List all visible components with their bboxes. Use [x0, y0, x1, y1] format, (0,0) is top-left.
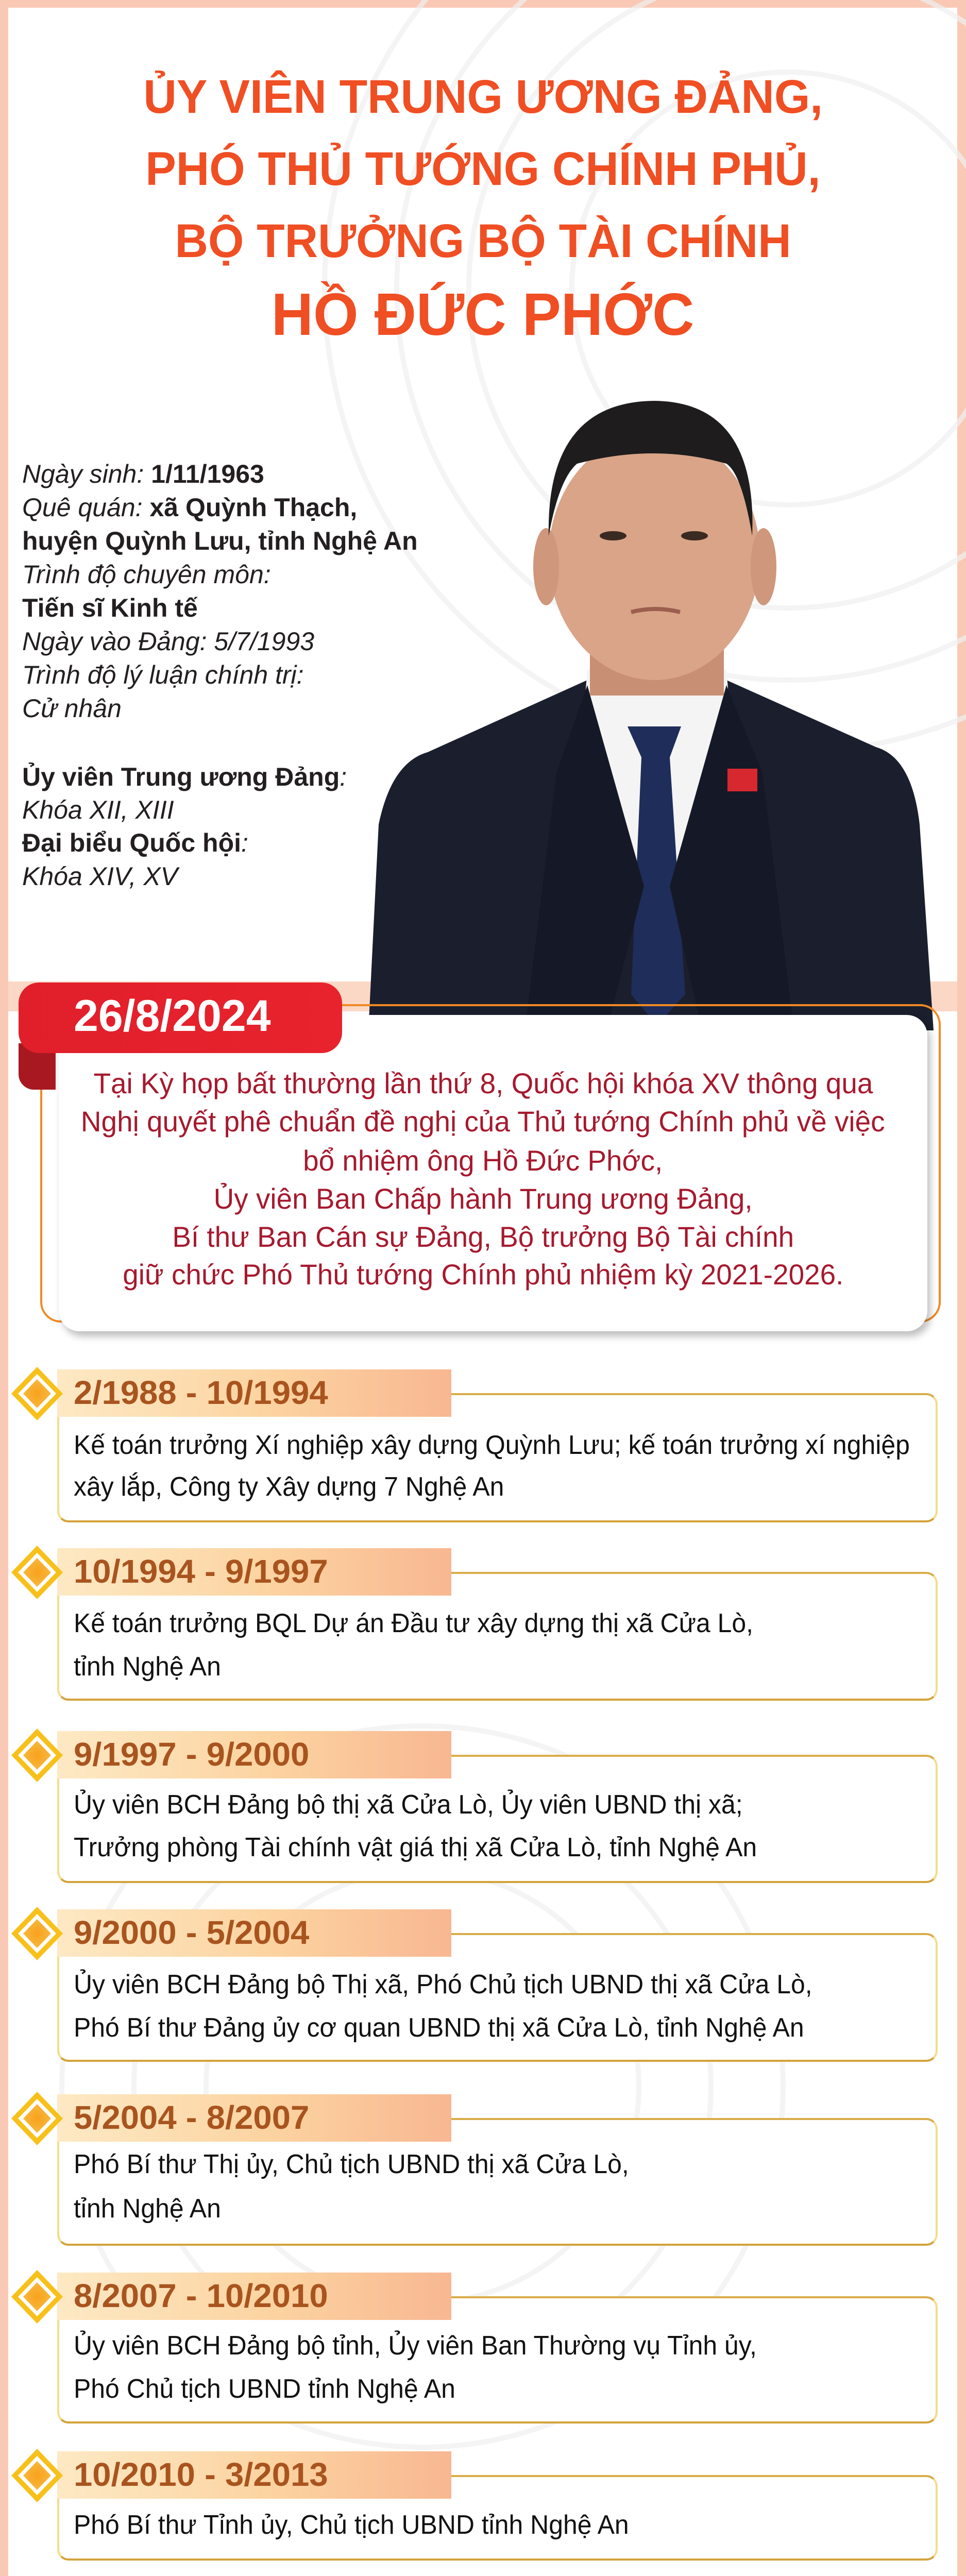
timeline item 2: 10/1994 - 9/1997 — [74, 1553, 328, 1590]
timeline item 1: xây lắp, Công ty Xây dựng 7 Nghệ An — [74, 1472, 504, 1502]
timeline item 2: tỉnh Nghệ An — [74, 1652, 221, 1682]
timeline item 6: Ủy viên BCH Đảng bộ tỉnh, Ủy viên Ban Thường vụ Tỉnh ủy, — [74, 2331, 757, 2361]
timeline item 3 — [11, 1728, 938, 1883]
info block: Khóa XIV, XV — [22, 862, 178, 891]
icon: diamond — [11, 1907, 63, 1960]
timeline item 2: Kế toán trưởng BQL Dự án Đầu tư xây dựng thị xã Cửa Lò, — [74, 1608, 753, 1638]
date tab: 26/8/2024 — [74, 991, 271, 1041]
timeline item 5 — [11, 2092, 938, 2246]
timeline item 1: 2/1988 - 10/1994 — [74, 1374, 328, 1411]
title — [143, 70, 823, 348]
icon: diamond — [11, 2449, 63, 2502]
info block — [22, 460, 418, 891]
timeline item 7: 10/2010 - 3/2013 — [74, 2456, 328, 2493]
band behind photo — [8, 981, 957, 1011]
icon: diamond — [11, 2092, 63, 2145]
card text: Tại Kỳ họp bất thường lần thứ 8, Quốc hội khóa XV thông qua — [93, 1067, 873, 1099]
info block: huyện Quỳnh Lưu, tỉnh Nghệ An — [22, 527, 418, 555]
timeline item 4: Ủy viên BCH Đảng bộ Thị xã, Phó Chủ tịch UBND thị xã Cửa Lò, — [74, 1970, 812, 1999]
timeline item 5: Phó Bí thư Thị ủy, Chủ tịch UBND thị xã Cửa Lò, — [74, 2149, 629, 2179]
timeline item 7: Phó Bí thư Tỉnh ủy, Chủ tịch UBND tỉnh Nghệ An — [74, 2510, 629, 2540]
date tab — [19, 982, 342, 1053]
title: PHÓ THỦ TƯỚNG CHÍNH PHỦ, — [145, 143, 821, 195]
timeline item 4: Phó Bí thư Đảng ủy cơ quan UBND thị xã Cửa Lò, tỉnh Nghệ An — [74, 2013, 804, 2043]
panel: appointment card — [19, 982, 941, 1341]
timeline item 5: tỉnh Nghệ An — [74, 2194, 221, 2224]
timeline item 6: 8/2007 - 10/2010 — [74, 2277, 328, 2314]
info block: Khóa XII, XIII — [22, 795, 174, 824]
card text: giữ chức Phó Thủ tướng Chính phủ nhiệm kỳ 2021-2026. — [123, 1258, 843, 1291]
card text: bổ nhiệm ông Hồ Đức Phớc, — [303, 1144, 663, 1177]
timeline item 6: Phó Chủ tịch UBND tỉnh Nghệ An — [74, 2374, 455, 2404]
timeline item 1 — [11, 1367, 938, 1522]
info block: Đại biểu Quốc hội: — [22, 828, 248, 857]
card text: Nghị quyết phê chuẩn đề nghị của Thủ tướng Chính phủ về việc — [81, 1105, 885, 1138]
timeline item 3: Trưởng phòng Tài chính vật giá thị xã Cửa Lò, tỉnh Nghệ An — [74, 1833, 757, 1862]
icon: diamond — [11, 1367, 63, 1420]
timeline item 3: 9/1997 - 9/2000 — [74, 1736, 309, 1773]
info block: Cử nhân — [22, 694, 122, 723]
info block: Ngày sinh: 1/11/1963 — [22, 460, 264, 488]
timeline item 7 — [11, 2449, 938, 2561]
info block: Ủy viên Trung ương Đảng: — [22, 762, 347, 791]
title: ỦY VIÊN TRUNG ƯƠNG ĐẢNG, — [143, 71, 823, 123]
timeline item 5: 5/2004 - 8/2007 — [74, 2099, 309, 2136]
title: HỒ ĐỨC PHỚC — [272, 281, 694, 348]
card text — [81, 1067, 885, 1291]
title: BỘ TRƯỞNG BỘ TÀI CHÍNH — [175, 215, 791, 267]
icon: diamond — [11, 1728, 63, 1782]
portrait photo — [369, 401, 934, 1030]
card text: Ủy viên Ban Chấp hành Trung ương Đảng, — [214, 1182, 752, 1215]
timeline item 6 — [11, 2270, 938, 2424]
icon: diamond — [11, 2270, 63, 2324]
timeline item 3: Ủy viên BCH Đảng bộ thị xã Cửa Lò, Ủy viên UBND thị xã; — [74, 1790, 743, 1820]
card text: Bí thư Ban Cán sự Đảng, Bộ trưởng Bộ Tài chính — [172, 1221, 794, 1253]
icon: diamond — [11, 1546, 63, 1599]
info block: Trình độ lý luận chính trị: — [22, 660, 304, 689]
info block: Ngày vào Đảng: 5/7/1993 — [22, 627, 314, 656]
timeline item 1: Kế toán trưởng Xí nghiệp xây dựng Quỳnh Lưu; kế toán trưởng xí nghiệp — [74, 1430, 910, 1460]
timeline item 2 — [11, 1546, 938, 1701]
timeline item 4: 9/2000 - 5/2004 — [74, 1914, 309, 1951]
info block: Tiến sĩ Kinh tế — [22, 594, 198, 622]
info block: Quê quán: xã Quỳnh Thạch, — [22, 493, 357, 522]
info block: Trình độ chuyên môn: — [22, 560, 271, 589]
timeline item 4 — [11, 1907, 938, 2062]
